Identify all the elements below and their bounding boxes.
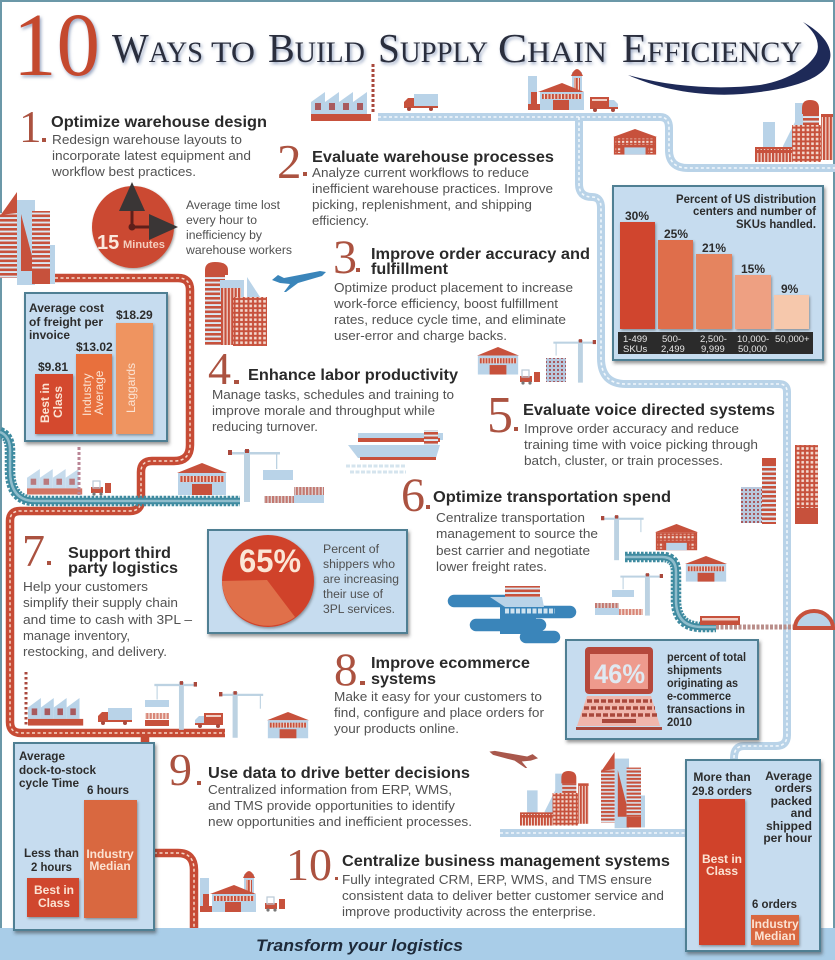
- icon: tall city item 9: [601, 752, 645, 828]
- body 10: [342, 872, 664, 919]
- item 4: [208, 343, 458, 434]
- freight values: $18.29: [116, 308, 153, 322]
- body 1: Redesign warehouse layouts to: [52, 132, 242, 147]
- body 1: incorporate latest equipment and: [52, 148, 251, 163]
- icon: warehouse top: [613, 129, 657, 155]
- road: red network: [10, 278, 225, 928]
- number 6: 6: [401, 469, 425, 522]
- orders caption: orders: [775, 781, 812, 795]
- body 5: [524, 421, 758, 468]
- icon: city left: [0, 192, 55, 285]
- freight title: of freight per: [29, 315, 103, 329]
- item 3: [333, 231, 590, 343]
- number 9: 9: [169, 744, 192, 795]
- orders bar labels: Class: [706, 864, 738, 878]
- icon: warehouse item 7: [267, 712, 309, 738]
- title words: BUILD: [268, 25, 365, 71]
- pie caption: their use of: [323, 587, 384, 601]
- axis strip: SKUs: [623, 344, 648, 355]
- panel: 65 percent: [208, 530, 407, 633]
- icon: forklift bottom: [265, 897, 285, 912]
- title words: SUPPLY: [378, 25, 488, 71]
- heading 7: Support third: [68, 545, 171, 562]
- number 3: 3: [333, 231, 357, 284]
- dock title: dock-to-stock: [19, 763, 96, 777]
- dock title: cycle Time: [19, 776, 79, 790]
- dock values: [24, 783, 129, 874]
- icon: factory top: [311, 64, 373, 121]
- icon: crane 2 item 7: [219, 691, 263, 738]
- heading 8: [371, 655, 530, 688]
- pie caption: are increasing: [323, 572, 399, 586]
- icon: city top right: [755, 100, 833, 162]
- body 7: [23, 579, 193, 659]
- icon: truck top: [404, 94, 438, 111]
- body 2: Analyze current workflows to reduce: [312, 165, 529, 180]
- icon: middle city: [205, 262, 267, 346]
- heading 1: Optimize warehouse design: [51, 114, 267, 131]
- laptop caption: transactions in: [667, 702, 745, 716]
- panel: dock to stock: [14, 743, 154, 930]
- number 5: 5: [487, 387, 513, 444]
- pie caption: [323, 542, 399, 616]
- number 2: 2: [277, 134, 302, 189]
- icon: forklift lower left: [91, 481, 111, 496]
- dock title: Average: [19, 749, 65, 763]
- dock bar labels: [34, 847, 134, 910]
- body 6: Centralize transportation: [436, 510, 585, 525]
- icon: crane item 7: [145, 681, 197, 730]
- body 7: Help your customers: [23, 579, 148, 594]
- dock bars: [27, 800, 137, 918]
- chart title: [676, 192, 817, 231]
- freight bar labels: Class: [51, 386, 65, 418]
- icon: cranes and warehouses near item 6: [595, 515, 727, 616]
- number 8: 8: [334, 644, 358, 696]
- body 10: improve productivity across the enterprise.: [342, 904, 596, 919]
- orders bar labels: Industry: [751, 917, 799, 931]
- clock caption: [185, 198, 292, 257]
- heading 3: Improve order accuracy and: [371, 246, 590, 263]
- body 8: find, configure and place orders for: [334, 705, 545, 720]
- dock bar labels: Class: [38, 896, 70, 910]
- bar values: 25%: [664, 227, 688, 241]
- laptop caption: e-commerce: [667, 689, 731, 703]
- body 4: [212, 387, 454, 434]
- clock caption: warehouse workers: [185, 243, 292, 257]
- title: [13, 0, 802, 95]
- bar values: [625, 209, 799, 296]
- body 7: restocking, and delivery.: [23, 644, 167, 659]
- clock caption: inefficiency by: [186, 228, 263, 242]
- clock face: [92, 186, 174, 268]
- body 2: efficiency.: [312, 213, 369, 228]
- orders bar labels: Median: [754, 929, 796, 943]
- axis strip: 500-: [662, 334, 681, 345]
- freight title: [29, 301, 104, 342]
- body 5: Improve order accuracy and reduce: [524, 421, 739, 436]
- heading 3: [371, 246, 590, 278]
- icon: red truck item 7: [195, 713, 223, 728]
- body 1: workflow best practices.: [51, 164, 196, 179]
- icon: blue plane: [272, 271, 326, 292]
- body 3: work-force efficiency, boost fulfillment: [333, 296, 558, 311]
- number 1: 1: [19, 102, 42, 152]
- clock label: 15: [97, 232, 119, 254]
- body 5: training time with voice picking through: [524, 437, 758, 452]
- body 7: simplify their supply chain: [23, 595, 178, 610]
- orders values: More than: [693, 770, 751, 784]
- body 4: Manage tasks, schedules and training to: [212, 387, 454, 402]
- orders caption: per hour: [763, 831, 812, 845]
- chart title: Percent of US distribution: [676, 192, 816, 206]
- heading 9: Use data to drive better decisions: [208, 765, 470, 782]
- clock hands: [119, 182, 178, 240]
- orders caption: packed: [771, 794, 812, 808]
- body 6: lower freight rates.: [436, 559, 547, 574]
- chart title: centers and number of: [693, 204, 817, 218]
- rail: teal track lower left: [0, 432, 240, 501]
- icon: train and tunnel: [700, 611, 833, 628]
- freight bar labels: Average: [92, 370, 106, 415]
- body 6: management to source the: [436, 526, 598, 541]
- body 9: new opportunities and inefficient processes.: [208, 814, 472, 829]
- laptop caption: 2010: [667, 715, 692, 729]
- icon: barn top: [528, 69, 584, 110]
- icon: warehouse and crane near item 3: [477, 339, 596, 385]
- title words: [112, 25, 802, 71]
- bars: [620, 222, 809, 329]
- body 1: [51, 132, 251, 179]
- pie caption: Percent of: [323, 542, 380, 556]
- title words: WAYS: [112, 25, 203, 71]
- pie caption: 3PL services.: [323, 602, 395, 616]
- laptop caption: shipments: [667, 663, 722, 677]
- icon: city item 9: [520, 771, 589, 826]
- icon: crane and containers lower left: [228, 449, 324, 503]
- icon: factory lower left: [27, 447, 82, 497]
- axis strip: [618, 332, 813, 355]
- icon: factory item 7: [26, 672, 83, 726]
- item 9: [169, 744, 472, 829]
- rail: teal track right: [625, 557, 835, 627]
- dock bar labels: Best in: [34, 883, 74, 897]
- dock values: 6 hours: [87, 783, 129, 797]
- body 9: and TMS provide opportunities to identify: [208, 798, 455, 813]
- icon: red truck top: [590, 97, 618, 112]
- orders bar labels: [702, 852, 799, 943]
- dock bar labels: Median: [89, 859, 131, 873]
- body 7: and time to cash with 3PL –: [23, 612, 193, 627]
- heading 4: Enhance labor productivity: [248, 367, 458, 384]
- item 2: [277, 134, 554, 228]
- item 6: [401, 469, 671, 574]
- body 7: manage inventory,: [23, 628, 130, 643]
- title words: EFFICIENCY: [622, 25, 802, 71]
- body 4: reducing turnover.: [212, 419, 318, 434]
- axis strip: 2,500-: [700, 334, 727, 345]
- laptop caption: originating as: [667, 676, 738, 690]
- orders values: 29.8 orders: [692, 784, 752, 798]
- body 3: rates, reduce cycle time, and eliminate: [334, 312, 566, 327]
- panel: freight cost: [25, 293, 167, 441]
- freight values: $9.81: [38, 360, 68, 374]
- body 3: user-error and charge backs.: [334, 328, 507, 343]
- icon: buildings right: [741, 445, 818, 524]
- clock stat: [92, 182, 292, 268]
- heading 8: Improve ecommerce: [371, 655, 530, 672]
- chart panel: SKUs: [613, 186, 823, 360]
- body 5: batch, cluster, or train processes.: [524, 453, 723, 468]
- body 10: Fully integrated CRM, ERP, WMS, and TMS ensure: [342, 872, 652, 887]
- swoosh: [628, 22, 830, 95]
- orders values: 6 orders: [752, 897, 797, 911]
- freight values: $13.02: [76, 340, 113, 354]
- body 3: [333, 280, 573, 343]
- title words: CHAIN: [498, 25, 607, 71]
- heading 10: Centralize business management systems: [342, 853, 670, 870]
- orders caption: shipped: [766, 819, 812, 833]
- axis strip: 10,000-: [737, 334, 769, 345]
- clock label: [97, 232, 165, 254]
- heading 2: Evaluate warehouse processes: [312, 149, 554, 166]
- bar values: 9%: [781, 282, 799, 296]
- orders bar labels: Best in: [702, 852, 742, 866]
- bar values: 30%: [625, 209, 649, 223]
- panel: 46 percent: [566, 640, 758, 739]
- body 10: consistent data to deliver better customer service and: [342, 888, 664, 903]
- body 9: Centralized information from ERP, WMS,: [208, 782, 452, 797]
- orders values: [692, 770, 797, 911]
- number 7: 7: [22, 525, 45, 576]
- dock title: [19, 749, 96, 790]
- freight bar labels: Laggards: [124, 363, 138, 413]
- item 10: [286, 839, 670, 919]
- axis strip: 1-499: [623, 334, 647, 345]
- axis strip: 50,000+: [775, 334, 810, 345]
- orders caption: Average: [765, 769, 812, 783]
- icon: ship on water: [454, 586, 570, 637]
- freight bar labels: Best in: [38, 383, 52, 423]
- freight title: Average cost: [29, 301, 104, 315]
- body 2: [312, 165, 553, 228]
- item 8: [334, 644, 545, 736]
- icon: red plane: [489, 751, 538, 768]
- bar values: 21%: [702, 241, 726, 255]
- item 1: [19, 102, 267, 179]
- chart title: SKUs handled.: [736, 217, 816, 231]
- laptop value: 46%: [594, 659, 645, 689]
- dock values: Less than: [24, 846, 79, 860]
- icon: warehouse lower left: [177, 463, 227, 495]
- heading 7: party logistics: [68, 560, 178, 577]
- freight values: [38, 308, 153, 374]
- title words: TO: [211, 36, 255, 69]
- footer band: [0, 928, 835, 960]
- road: blue network: [378, 117, 835, 833]
- pie chart: [222, 535, 314, 627]
- body 8: Make it easy for your customers to: [334, 689, 542, 704]
- heading 5: Evaluate voice directed systems: [523, 402, 775, 419]
- footer text: Transform your logistics: [256, 936, 463, 955]
- heading 6: Optimize transportation spend: [433, 489, 671, 506]
- body 6: [436, 510, 598, 574]
- laptop caption: [667, 650, 746, 729]
- pie caption: shippers who: [323, 557, 395, 571]
- icon: laptop: [576, 647, 662, 730]
- number 4: 4: [208, 343, 231, 394]
- axis strip: 50,000: [738, 344, 767, 355]
- pie value: 65%: [239, 543, 301, 579]
- orders caption: and: [791, 806, 812, 820]
- heading 7: [68, 545, 178, 577]
- body 2: inefficient warehouse practices. Improve: [312, 181, 553, 196]
- icon: barn bottom: [200, 871, 256, 912]
- icon: ship: [346, 430, 443, 472]
- freight bar labels: [38, 363, 138, 423]
- body 4: improve morale and throughput while: [212, 403, 435, 418]
- orders caption: [763, 769, 812, 845]
- axis strip: 9,999: [701, 344, 725, 355]
- body 8: your products online.: [334, 721, 459, 736]
- body 8: [334, 689, 545, 736]
- orders bars: [699, 799, 799, 945]
- icon: truck item 7: [98, 708, 132, 725]
- laptop caption: percent of total: [667, 650, 746, 664]
- clock label: Minutes: [123, 239, 165, 251]
- freight bar labels: Industry: [80, 373, 94, 416]
- bar values: 15%: [741, 262, 765, 276]
- item 7: [22, 525, 193, 659]
- heading 8: systems: [371, 671, 436, 688]
- dock bar labels: Industry: [86, 847, 134, 861]
- item 5: [487, 387, 775, 468]
- panel: orders per hour: [686, 760, 820, 951]
- clock caption: Average time lost: [186, 198, 281, 212]
- body 3: Optimize product placement to increase: [334, 280, 573, 295]
- freight bars: [35, 323, 153, 434]
- heading 3: fulfillment: [371, 261, 448, 278]
- dock values: 2 hours: [31, 860, 72, 874]
- number 10: 10: [286, 839, 332, 890]
- body 6: best carrier and negotiate: [436, 543, 590, 558]
- body 2: picking, replenishment, and shipping: [312, 197, 532, 212]
- axis strip: 2,499: [661, 344, 685, 355]
- freight title: invoice: [29, 328, 70, 342]
- clock caption: every hour to: [186, 213, 257, 227]
- body 9: [208, 782, 472, 829]
